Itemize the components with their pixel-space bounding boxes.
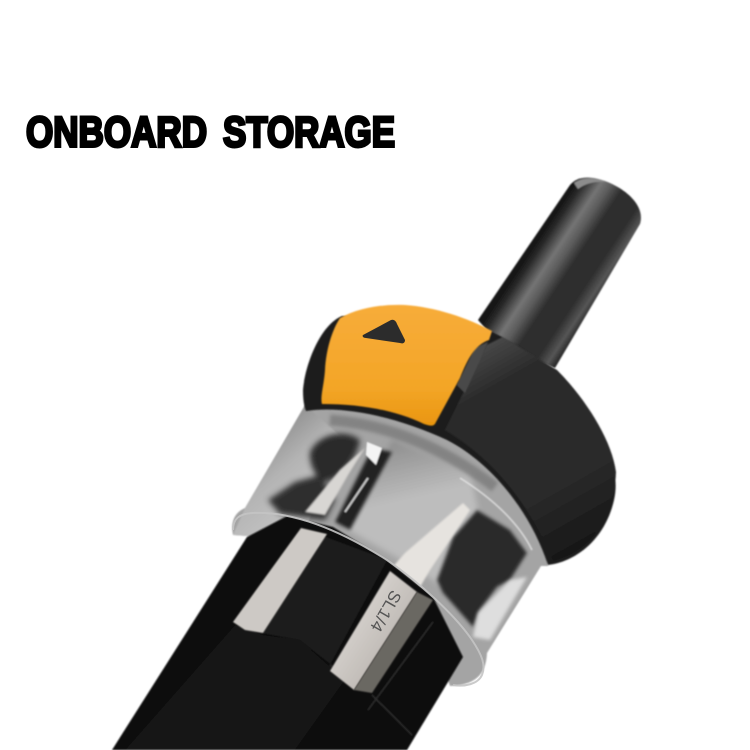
tool illustration bbox=[112, 178, 641, 750]
triangle arrow mark bbox=[363, 320, 405, 343]
shaft bbox=[478, 178, 641, 368]
centre panel bbox=[263, 537, 387, 675]
black cap bbox=[303, 316, 616, 565]
infographic canvas bbox=[26, 115, 642, 750]
handle body bbox=[112, 516, 463, 750]
bit engraving: SL1/4 bbox=[366, 587, 405, 635]
glass cup bbox=[232, 405, 548, 686]
orange slider button bbox=[321, 305, 492, 426]
glass rim bbox=[233, 513, 484, 686]
dark bit holder seen through glass bbox=[437, 510, 527, 627]
title: STORAGE bbox=[223, 108, 395, 156]
driver bit left bbox=[233, 528, 327, 633]
glass interior bbox=[268, 434, 478, 585]
driver bit SL 1/4 bbox=[330, 571, 433, 693]
title: ONBOARD bbox=[26, 108, 207, 156]
title bbox=[26, 108, 395, 156]
